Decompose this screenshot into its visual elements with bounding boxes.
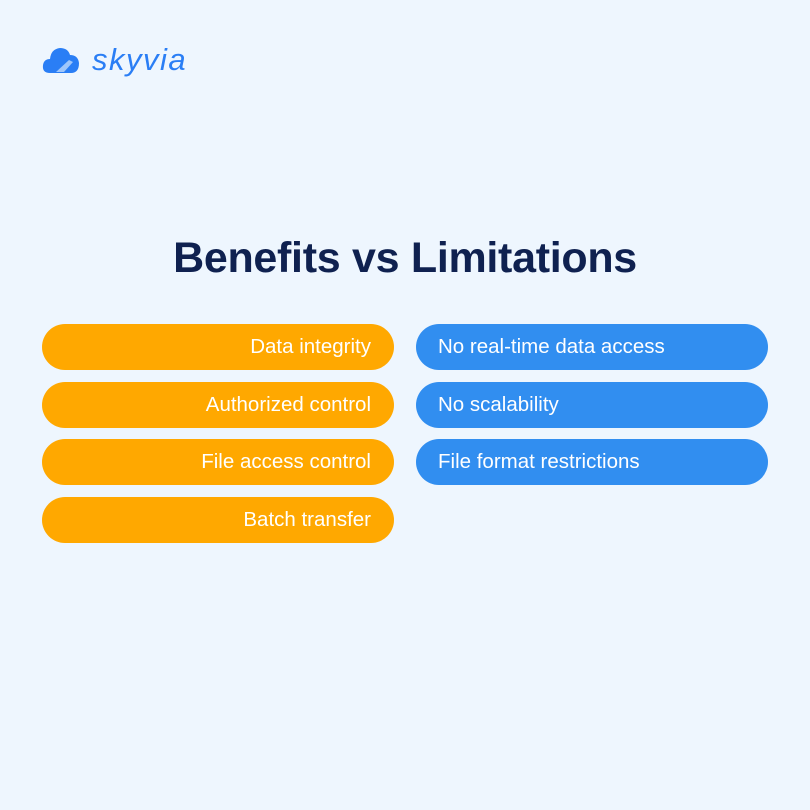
pill: File access control: File access control	[201, 450, 371, 473]
pill: File format restrictions: File format restrictions	[438, 450, 640, 473]
benefits column	[42, 324, 394, 543]
pill: Data integrity: Data integrity	[250, 335, 371, 358]
wordmark: skyvia	[92, 42, 187, 77]
pill: No real-time data access	[416, 324, 768, 370]
pill: No scalability	[416, 382, 768, 428]
pill: Data integrity	[42, 324, 394, 370]
pill: Authorized control: Authorized control	[206, 393, 371, 416]
pill: Batch transfer	[42, 497, 394, 543]
pill: Authorized control	[42, 382, 394, 428]
logo	[42, 42, 187, 77]
pill: Batch transfer: Batch transfer	[243, 508, 371, 531]
icon: cloud	[42, 48, 79, 73]
pill: No real-time data access: No real-time data access	[438, 335, 665, 358]
limitations column	[416, 324, 768, 485]
pill: File access control	[42, 439, 394, 485]
pill: No scalability: No scalability	[438, 393, 559, 416]
pill: File format restrictions	[416, 439, 768, 485]
title: Benefits vs Limitations	[173, 234, 637, 282]
